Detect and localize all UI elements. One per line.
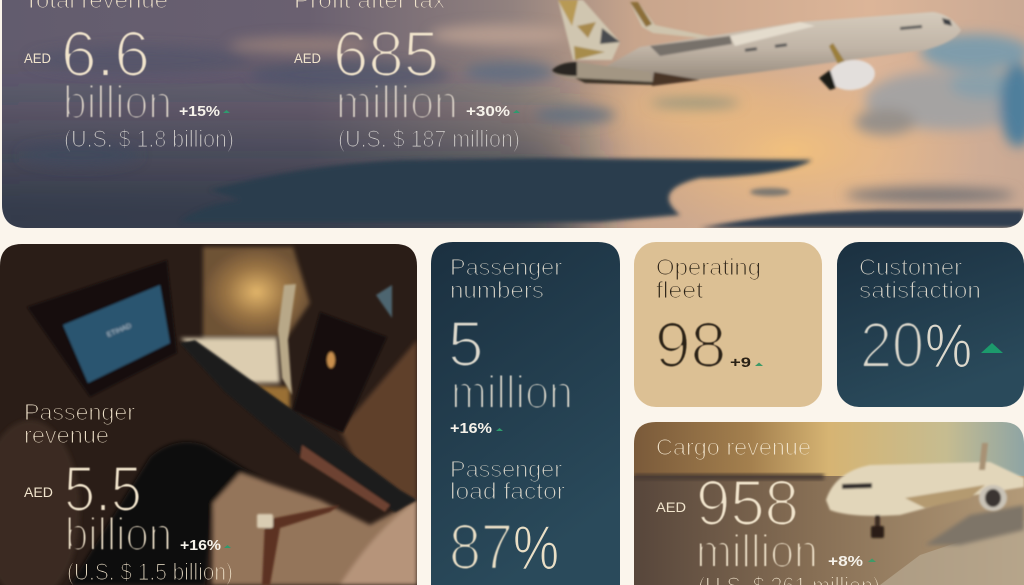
- photo: sky and clouds: [2, 0, 1024, 228]
- heading: passenger revenue: Passenger: [24, 399, 135, 425]
- panel: customer satisfaction: [837, 242, 1024, 407]
- change: +16%: +16%: [180, 538, 221, 554]
- icon: up arrow: [224, 545, 231, 548]
- panel: passenger numbers and load factor: load factor: [450, 478, 565, 504]
- heading: cargo revenue: Cargo revenue: [656, 434, 811, 460]
- change: +15%: +15%: [179, 104, 220, 120]
- photo: business cabin seat: [0, 244, 417, 585]
- panel: total revenue and profit hero: [2, 0, 1024, 228]
- usd equivalent: (U.S. $ 1.8 billion): [64, 126, 234, 153]
- heading: operating fleet: Operating: [656, 254, 761, 280]
- value: 87%: %: [513, 514, 559, 583]
- value unit: million: million: [451, 366, 573, 418]
- panel: passenger numbers and load factor: numbers: [450, 277, 544, 303]
- panel: customer satisfaction: satisfaction: [859, 277, 981, 303]
- icon: up arrow: [513, 110, 520, 113]
- value: 5.5: 5.5: [64, 453, 142, 525]
- value unit: million: million: [336, 76, 458, 128]
- heading: passenger load factor: Passenger: [450, 456, 562, 482]
- icon: up arrow: [868, 558, 876, 562]
- photo: cargo aircraft on apron: [634, 422, 1024, 585]
- text: cargo revenue: [656, 434, 880, 585]
- value: 20%: %: [925, 312, 972, 381]
- value: 20%: 20: [860, 309, 924, 381]
- value: 6.6: 6.6: [61, 18, 150, 90]
- label: AED: AED: [24, 50, 51, 66]
- value: 20%: [860, 309, 972, 381]
- text: passenger revenue: [24, 399, 233, 585]
- text: passenger revenue: revenue: [24, 422, 109, 448]
- value: 87%: [449, 511, 559, 583]
- value: 98: 98: [655, 309, 726, 381]
- change: +9: +9: [730, 355, 751, 370]
- heading: customer satisfaction: Customer: [859, 254, 962, 280]
- value: 87%: 87: [449, 511, 513, 583]
- usd equivalent: (U.S. $ 187 million): [338, 126, 520, 153]
- label: AED: AED: [294, 50, 321, 66]
- icon: up arrow: [496, 428, 503, 431]
- icon: up arrow: [981, 343, 1003, 353]
- panel: operating fleet: [634, 242, 822, 407]
- heading: passenger numbers: Passenger: [450, 254, 562, 280]
- value unit: billion: billion: [65, 508, 172, 560]
- photo: business cabin seat: ETIHAD: [106, 323, 133, 339]
- value unit: million: million: [696, 525, 818, 577]
- change: +16%: +16%: [450, 421, 492, 437]
- icon: airplane in flight: [552, 0, 961, 92]
- change: +30%: +30%: [466, 104, 510, 120]
- label: AED: AED: [24, 484, 53, 500]
- text: total revenue: [24, 0, 234, 153]
- icon: up arrow: [755, 362, 763, 366]
- value unit: billion: billion: [63, 76, 172, 128]
- value: 685: 685: [333, 18, 439, 90]
- panel: passenger numbers and load factor: [431, 242, 620, 585]
- panel: passenger revenue: [0, 244, 417, 585]
- label: AED: AED: [656, 499, 686, 515]
- text: profit after tax: [294, 0, 520, 153]
- panel: operating fleet: fleet: [656, 277, 704, 303]
- value: 958: 958: [696, 467, 799, 539]
- panel: cargo revenue: [634, 422, 1024, 585]
- value: 5: 5: [448, 308, 484, 380]
- icon: up arrow: [223, 110, 230, 113]
- change: +8%: +8%: [828, 554, 863, 570]
